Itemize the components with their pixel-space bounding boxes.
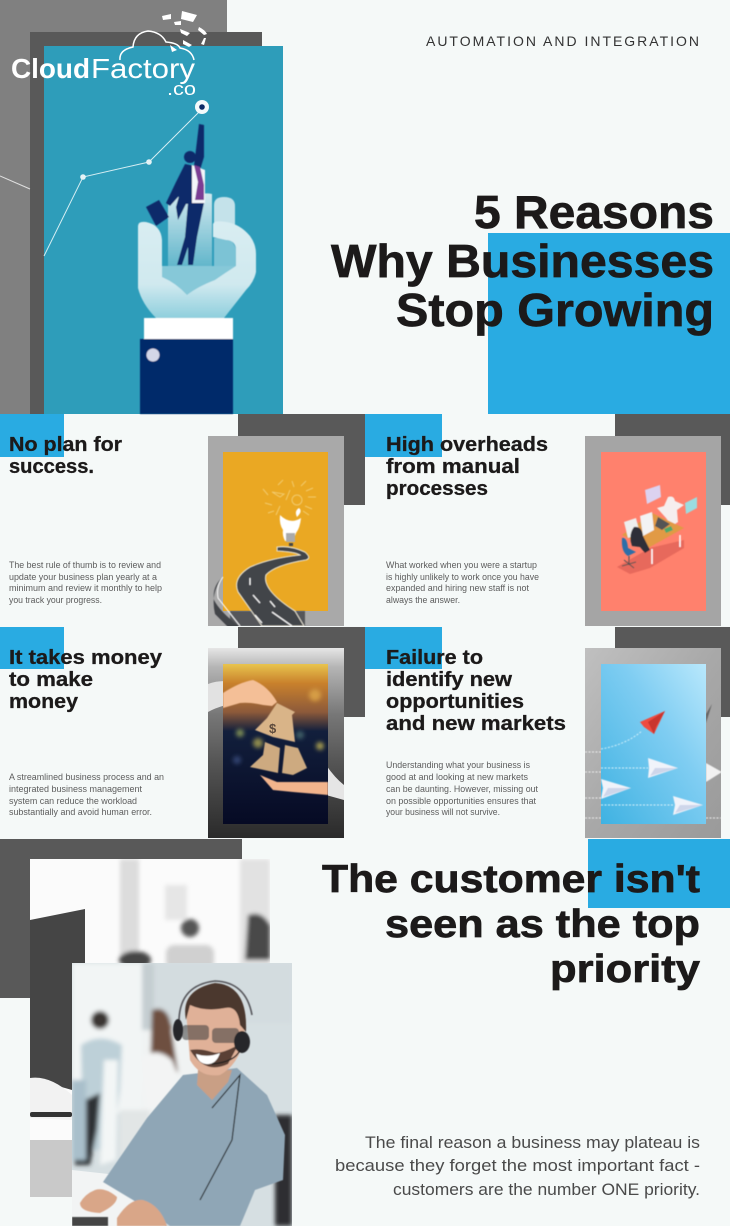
text block: What worked when you were a startup <box>386 560 537 571</box>
heading: identify new <box>386 669 512 691</box>
text block: on possible opportunities ensures that <box>386 796 536 807</box>
heading <box>386 434 548 500</box>
heading: and new markets <box>386 713 566 735</box>
panel: no plan for success <box>0 414 365 627</box>
logo: CloudFactory.co: Factory <box>91 53 195 84</box>
logo: CloudFactory.co: .co <box>167 79 196 99</box>
panel: customer priority <box>0 839 730 1226</box>
icon: lightbulb <box>263 480 316 546</box>
heading: processes <box>386 478 488 500</box>
heading: priority <box>550 948 700 991</box>
panel: it takes money <box>0 627 365 838</box>
text block: The final reason a business may plateau is <box>365 1133 700 1152</box>
title <box>331 186 714 336</box>
icon: hand holding businessman <box>138 124 256 414</box>
heading: opportunities <box>386 691 524 713</box>
text block <box>386 760 538 818</box>
heading: Failure to <box>386 647 483 669</box>
text block <box>335 1133 700 1199</box>
heading: money <box>9 691 79 713</box>
heading: It takes money <box>9 647 163 669</box>
heading <box>322 858 700 991</box>
text block <box>386 560 539 606</box>
image: desk and robot <box>585 436 721 626</box>
title: Stop Growing <box>396 284 714 336</box>
heading: No plan for <box>9 434 122 456</box>
image: money bags exchanged: $ <box>269 721 277 736</box>
image: paper planes <box>585 648 722 838</box>
logo: CloudFactory.co: Cloud <box>11 53 90 84</box>
text block: expanded and hiring new staff is not <box>386 583 529 594</box>
text block <box>9 560 162 606</box>
text block: good at and looking at new markets <box>386 772 528 783</box>
heading <box>9 434 122 478</box>
blue accent behind title <box>488 233 730 414</box>
heading: from manual <box>386 456 520 478</box>
text block: update your business plan yearly at a <box>9 572 158 583</box>
text block: integrated business management <box>9 784 142 795</box>
image: office background grayscale <box>30 859 270 1197</box>
hero illustration panel <box>0 0 283 414</box>
image: road to lightbulb <box>208 436 344 627</box>
text block <box>9 772 164 818</box>
heading: success. <box>9 456 94 478</box>
image: money bags exchanged <box>208 648 344 838</box>
text block: Understanding what your business is <box>386 760 530 771</box>
heading <box>386 647 566 735</box>
text block: The best rule of thumb is to review and <box>9 560 161 571</box>
heading: High overheads <box>386 434 548 456</box>
text block: because they forget the most important fact - <box>335 1156 700 1175</box>
panel: failure to identify new opportunities <box>365 627 730 838</box>
title: 5 Reasons <box>474 186 714 238</box>
heading: to make <box>9 669 93 691</box>
text block: A streamlined business process and an <box>9 772 164 783</box>
eyebrow label: AUTOMATION AND INTEGRATION <box>426 33 699 49</box>
heading <box>9 647 163 713</box>
logo: CloudFactory.co <box>11 11 207 99</box>
text block: system can reduce the workload <box>9 796 137 807</box>
image: smiling call-centre agent <box>72 963 292 1226</box>
text block: always the answer. <box>386 595 460 606</box>
text block: is highly unlikely to work once you have <box>386 572 539 583</box>
text block: substantially and avoid human error. <box>9 807 152 818</box>
text block: minimum and review it monthly to help <box>9 583 162 594</box>
text block: your business will not survive. <box>386 807 500 818</box>
icon: growth line chart <box>44 100 209 256</box>
heading: The customer isn't <box>322 858 700 901</box>
text block: you track your progress. <box>9 595 102 606</box>
panel: high overheads <box>365 414 730 626</box>
icon: businessman <box>146 124 205 265</box>
title: Why Businesses <box>331 235 714 287</box>
text block: customers are the number ONE priority. <box>393 1180 700 1199</box>
heading: seen as the top <box>385 903 700 946</box>
text block: can be daunting. However, missing out <box>386 784 538 795</box>
